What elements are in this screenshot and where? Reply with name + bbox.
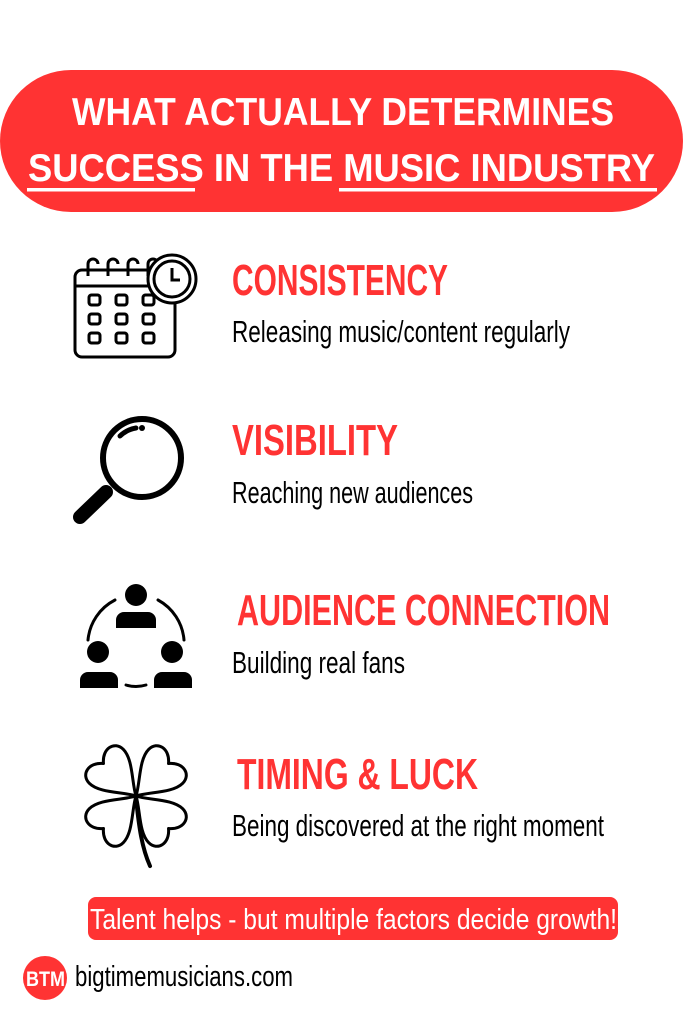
callout: footer message	[88, 897, 618, 940]
title banner	[0, 70, 683, 212]
heading: consistency	[232, 256, 570, 349]
title banner: SUCCESS IN THE MUSIC INDUSTRY	[28, 147, 655, 190]
heading: audience connection: Building real fans	[232, 645, 405, 680]
title banner: WHAT ACTUALLY DETERMINES	[72, 91, 614, 134]
heading: visibility	[232, 416, 473, 510]
icon: calendar with clock	[75, 255, 196, 357]
heading: visibility: Reaching new audiences	[232, 475, 473, 510]
heading: audience connection	[232, 586, 610, 680]
logo: BTM: bigtimemusicians.com	[75, 961, 293, 993]
heading: timing and luck	[232, 750, 604, 843]
heading: consistency: CONSISTENCY	[232, 256, 448, 305]
logo: BTM: BTM	[26, 968, 65, 991]
icon: magnifier	[80, 419, 181, 517]
icon: audience	[80, 584, 192, 688]
logo: BTM	[23, 956, 293, 1000]
icon: clover	[81, 741, 191, 866]
heading: timing and luck: TIMING & LUCK	[237, 750, 478, 799]
heading: visibility: VISIBILITY	[232, 416, 398, 465]
